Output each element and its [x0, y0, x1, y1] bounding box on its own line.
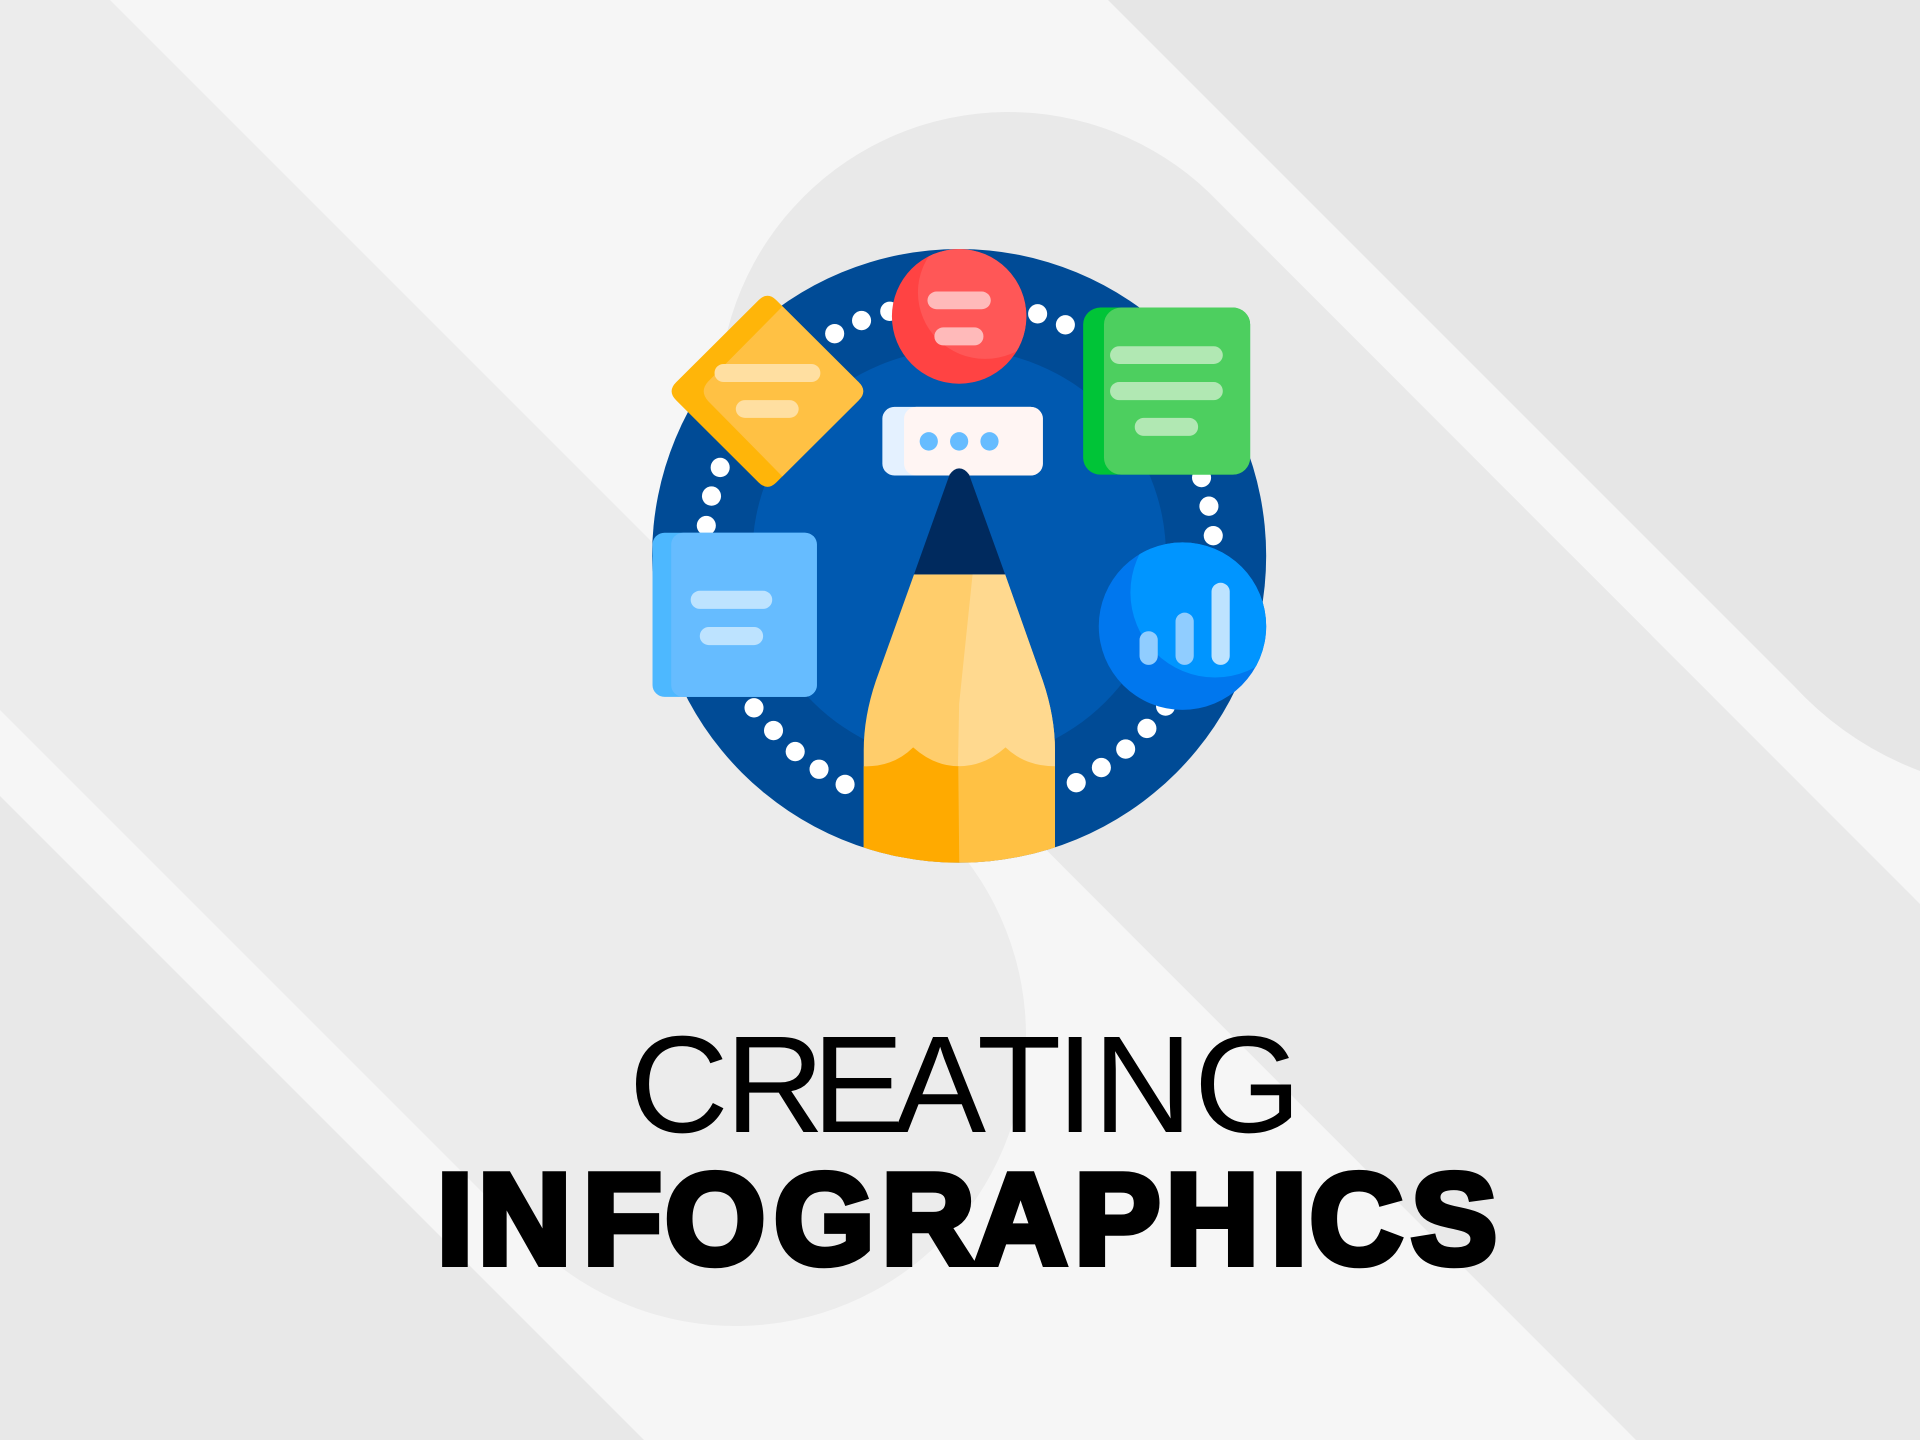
inner blue circle: [752, 349, 1166, 763]
title: [437, 1008, 1497, 1292]
title line one: CREATING: [629, 1008, 1301, 1162]
illustration: pencil with icons: [652, 249, 1266, 863]
pencil body: [864, 574, 1055, 893]
dark blue circle: [652, 249, 1266, 863]
icon: text input card: [882, 407, 1043, 475]
title line two: INFOGRAPHICS: [437, 1148, 1497, 1292]
icon: blue document: [653, 533, 817, 697]
pencil tip: [914, 468, 1005, 574]
pencil: [864, 468, 1055, 893]
icon: red circle note: [892, 249, 1026, 384]
icon: bar chart circle: [1098, 542, 1266, 710]
pencil base: [864, 748, 960, 863]
icon: green document: [1083, 308, 1250, 475]
icon: yellow diamond note: [672, 296, 880, 487]
dotted ring: [697, 302, 1223, 794]
